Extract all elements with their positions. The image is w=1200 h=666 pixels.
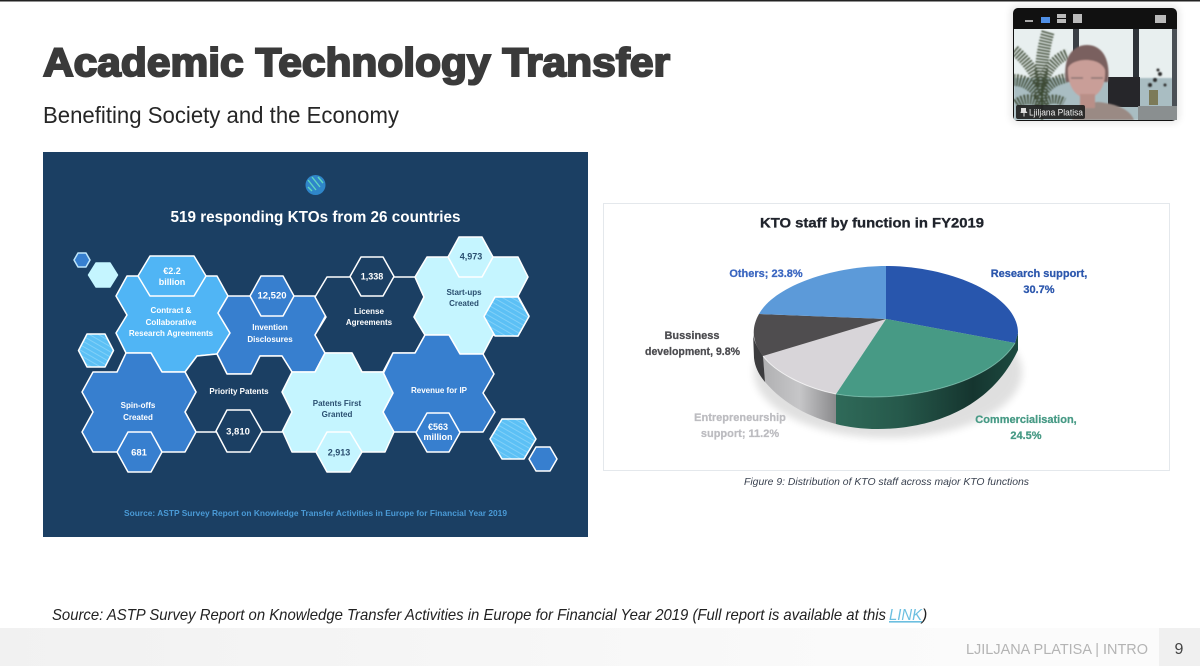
hex: start-ups created: Start-ups — [446, 288, 482, 297]
panel: KTO staff pie chart — [604, 204, 1170, 470]
hex: spin-offs created — [82, 353, 196, 472]
hex: contract and collaborative research: Collaborative — [146, 318, 197, 327]
label: entrepreneurship support: support; 11.2% — [701, 428, 779, 440]
hex: patents first granted — [282, 353, 394, 472]
participant name tag — [1016, 105, 1085, 119]
pie chart — [753, 266, 1022, 438]
hex: spin-offs created: Spin-offs — [121, 401, 156, 410]
video call thumbnail — [1011, 6, 1179, 123]
toolbar icons — [1025, 14, 1166, 23]
hex: priority patents: Priority Patents — [209, 387, 269, 396]
label: business development: development, 9.8% — [645, 346, 740, 358]
hex: spin-offs created: Created — [123, 413, 153, 422]
label: research support: 30.7% — [1023, 284, 1055, 296]
participant name tag: Ljiljana Platisa — [1029, 108, 1083, 118]
hex: contract and collaborative research: €2.2 — [163, 266, 181, 276]
label: research support — [991, 268, 1087, 296]
hex: invention disclosures: Disclosures — [247, 335, 293, 344]
subtitle: Benefiting Society and the Economy — [43, 102, 399, 128]
hex: revenue for IP: Revenue for IP — [411, 386, 468, 395]
label: others: Others; 23.8% — [729, 268, 803, 280]
footer bar — [0, 628, 1200, 666]
label: entrepreneurship support: Entrepreneurship — [694, 412, 786, 424]
hex: contract and collaborative research — [116, 256, 230, 372]
hex: patents first granted: 2,913 — [328, 448, 350, 458]
hex: contract and collaborative research: billion — [159, 277, 185, 287]
hex: start-ups created — [414, 237, 529, 354]
hex: revenue for IP — [383, 335, 495, 452]
figure caption: Figure 9: Distribution of KTO staff across major KTO functions — [744, 476, 1030, 488]
source note with link: ) — [920, 607, 927, 624]
panel heading: 519 responding KTOs from 26 countries — [170, 209, 460, 226]
hex: invention disclosures: Invention — [252, 323, 288, 332]
hex: contract and collaborative research: Contract & — [151, 306, 192, 315]
hex: patents first granted: Patents First — [313, 399, 362, 408]
hex: license agreements — [315, 257, 425, 372]
hex: spin-offs created: 681 — [131, 448, 148, 458]
source note with link: Source: ASTP Survey Report on Knowledge Transfer Activities in Europe for Financial Year 2019 (Full report is available at this — [52, 607, 886, 624]
panel: KTO hexagon infographic — [43, 152, 588, 537]
chart title: KTO staff by function in FY2019 — [760, 216, 984, 230]
hex: patents first granted: Granted — [322, 410, 352, 419]
hex: contract and collaborative research: Research Agreements — [129, 329, 214, 338]
video frame — [1014, 29, 1177, 120]
hex: invention disclosures — [217, 276, 326, 374]
label: business development: Bussiness — [664, 330, 720, 342]
panel source note: Source: ASTP Survey Report on Knowledge Transfer Activities in Europe for Financial Year 2019 — [124, 508, 507, 518]
hex: license agreements: 1,338 — [361, 272, 383, 282]
page number: 9 — [1175, 641, 1184, 658]
label: commercialisation: 24.5% — [1010, 430, 1042, 442]
hex: start-ups created: Created — [449, 299, 479, 308]
label: business development — [645, 330, 740, 358]
hex: start-ups created: 4,973 — [460, 252, 482, 262]
label: commercialisation: Commercialisation, — [975, 414, 1077, 426]
hex: priority patents — [185, 354, 292, 452]
hex: license agreements: License — [354, 307, 384, 316]
hex: revenue for IP: million — [424, 432, 452, 442]
footer author text: LJILJANA PLATISA | INTRO — [966, 641, 1148, 658]
hex: license agreements: Agreements — [346, 318, 393, 327]
decorative hexagons — [74, 253, 557, 471]
hex: invention disclosures: 12,520 — [257, 290, 287, 302]
source note with link: LINK — [889, 607, 923, 624]
icon: logo — [306, 175, 326, 195]
person — [1065, 45, 1134, 120]
hex: priority patents: 3,810 — [226, 426, 250, 438]
hex: revenue for IP: €563 — [428, 422, 448, 432]
title: Academic Technology Transfer — [43, 41, 670, 85]
label: entrepreneurship support — [694, 412, 786, 440]
label: research support: Research support, — [991, 268, 1087, 280]
label: commercialisation — [975, 414, 1077, 442]
